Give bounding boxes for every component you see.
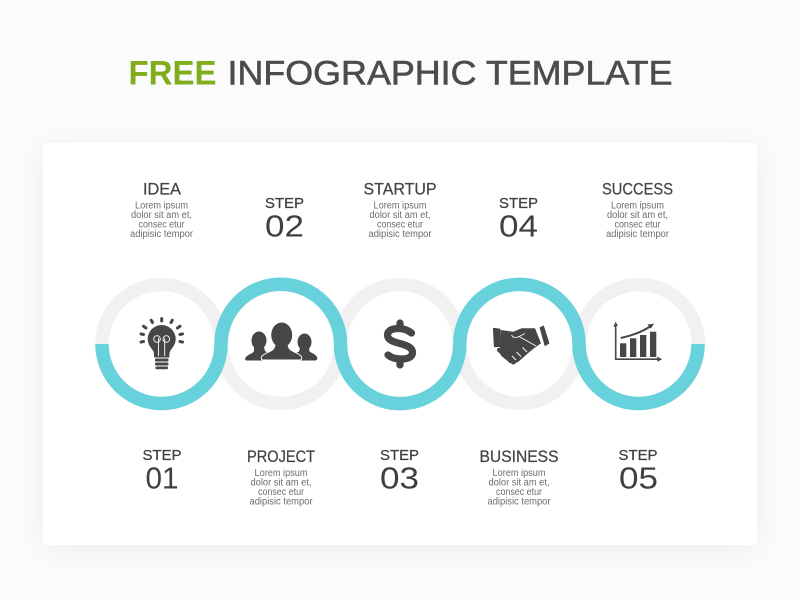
icon: growth chart: [613, 322, 662, 362]
text: startup: consec etur: [377, 220, 424, 230]
text: project: PROJECT: [247, 447, 315, 466]
text: step 03: STEP: [380, 447, 419, 464]
panel: white card: [43, 143, 757, 545]
text: success: dolor sit am et,: [607, 210, 668, 221]
text: success: consec etur: [614, 220, 661, 230]
text: startup: STARTUP: [364, 180, 436, 198]
text: step 04: [499, 195, 538, 244]
text: startup: adipisic tempor: [368, 229, 432, 240]
text: step 01: 01: [146, 460, 178, 496]
text: project: Lorem ipsum: [254, 468, 308, 479]
text: idea: IDEA: [143, 180, 182, 198]
text: step 04: STEP: [499, 195, 538, 212]
text: success: [602, 180, 673, 240]
text: business: dolor sit am et,: [488, 478, 550, 488]
text: success: Lorem ipsum: [611, 200, 664, 212]
text: project: [247, 447, 315, 508]
text: idea: dolor sit am et,: [131, 210, 192, 221]
text: business: [480, 447, 558, 508]
text: business: adipisic tempor: [488, 496, 551, 508]
icon: light bulb: [141, 318, 182, 369]
text: step 04: 04: [499, 208, 538, 244]
text: success: SUCCESS: [602, 180, 673, 198]
text: business: BUSINESS: [480, 447, 558, 466]
text: business: consec etur: [496, 487, 543, 498]
title: INFOGRAPHIC TEMPLATE: [228, 54, 672, 92]
text: step 03: 03: [380, 460, 419, 496]
title: FREE: [128, 54, 216, 92]
text: step 05: 05: [619, 460, 658, 496]
text: startup: dolor sit am et,: [370, 210, 430, 221]
text: step 02: [265, 195, 304, 244]
icon: handshake: [493, 326, 549, 363]
text: idea: adipisic tempor: [130, 229, 194, 240]
icon: group of people: [245, 322, 317, 360]
text: project: adipisic tempor: [250, 496, 313, 508]
text: success: adipisic tempor: [606, 229, 670, 240]
text: project: dolor sit am et,: [250, 478, 312, 488]
text: idea: [130, 180, 194, 240]
text: project: consec etur: [258, 487, 305, 498]
text: idea: consec etur: [138, 220, 185, 230]
text: startup: [364, 180, 436, 240]
text: step 01: [142, 447, 182, 496]
text: step 01: STEP: [142, 447, 182, 464]
text: startup: Lorem ipsum: [374, 200, 426, 212]
text: step 02: 02: [265, 208, 304, 244]
grey background rings: [102, 284, 698, 404]
text: step 05: [618, 447, 658, 496]
text: step 03: [380, 447, 419, 496]
text: business: Lorem ipsum: [492, 468, 546, 479]
icon: dollar sign: [388, 323, 412, 365]
text: step 02: STEP: [265, 195, 304, 212]
teal wave line: [102, 284, 698, 404]
text: idea: Lorem ipsum: [135, 200, 188, 212]
text: step 05: STEP: [618, 447, 658, 464]
